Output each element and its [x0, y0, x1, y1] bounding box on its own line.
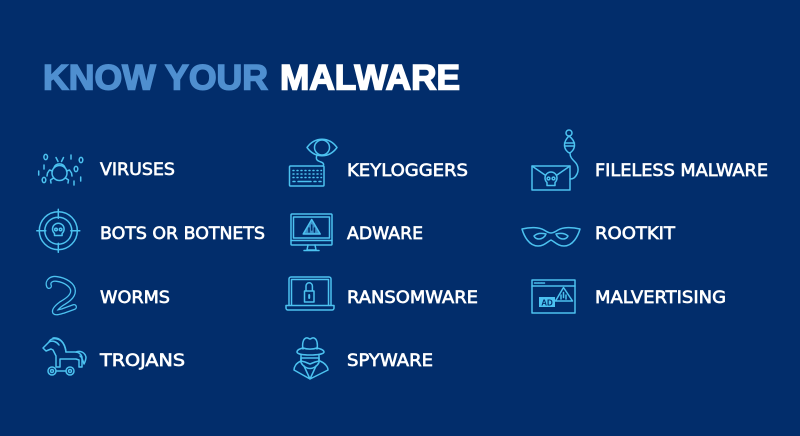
item: trojans — [43, 338, 185, 375]
icon: bug with binary digits — [39, 154, 83, 185]
icon: worm — [49, 279, 74, 312]
icon: eye above keyboard — [290, 139, 337, 186]
label: RANSOMWARE — [347, 288, 478, 308]
icon: skull in crosshair — [37, 209, 80, 252]
item: malvertising: AD — [541, 298, 553, 308]
item: bots or botnets — [37, 209, 265, 252]
icon: trojan horse on wheels — [43, 338, 86, 375]
label: ROOTKIT — [595, 224, 676, 244]
icon: mask — [522, 228, 580, 246]
item: malvertising — [532, 280, 726, 313]
icon: spy with hat and mask — [294, 338, 328, 379]
label: ADWARE — [347, 224, 423, 244]
label: KEYLOGGERS — [347, 161, 468, 181]
item: adware — [291, 214, 423, 250]
item: spyware — [294, 338, 433, 379]
item: worms — [49, 279, 170, 312]
icon: monitor with warning triangle — [291, 214, 332, 250]
label: MALVERTISING — [595, 288, 726, 308]
icon: browser window with ad and warning — [532, 280, 575, 313]
item: ransomware — [286, 277, 478, 310]
item: viruses — [39, 154, 175, 185]
label: FILELESS MALWARE — [595, 161, 768, 181]
icon: laptop with padlock — [286, 277, 334, 310]
title: KNOW YOUR — [43, 58, 268, 98]
item: rootkit — [522, 224, 676, 246]
icon: envelope with skull on fishing lure — [532, 130, 578, 190]
title — [43, 58, 460, 98]
label: BOTS OR BOTNETS — [100, 224, 265, 244]
label: VIRUSES — [100, 160, 175, 180]
item: fileless malware — [532, 130, 768, 190]
label: SPYWARE — [347, 351, 433, 371]
item: keyloggers — [290, 139, 468, 186]
label: TROJANS — [99, 351, 185, 371]
title: MALWARE — [280, 58, 460, 98]
label: WORMS — [100, 288, 170, 308]
